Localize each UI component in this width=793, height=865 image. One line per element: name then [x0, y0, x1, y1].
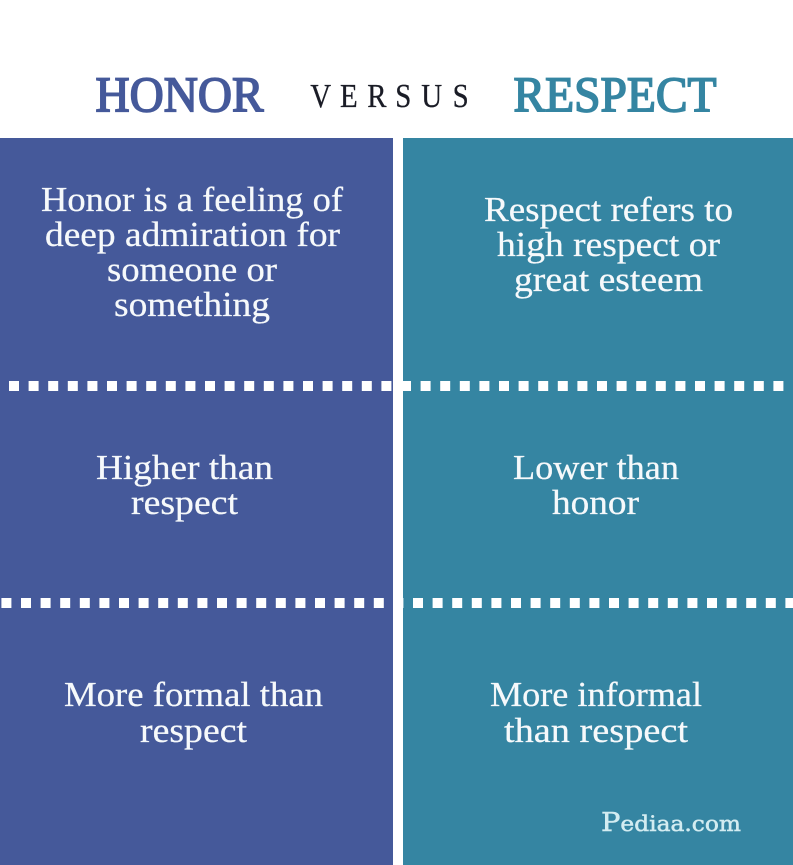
text: respect formality: than respect — [504, 712, 688, 750]
text: respect formality: More informal — [490, 676, 702, 714]
text: respect degree: honor — [552, 484, 640, 522]
text: honor formality — [64, 676, 323, 750]
text: respect definition: Respect refers to — [484, 191, 733, 229]
text: honor formality: More formal than — [64, 676, 323, 714]
logo: pediaa.com: Pediaa.com — [601, 808, 741, 838]
text: honor degree: respect — [131, 484, 238, 522]
text: respect definition — [484, 191, 733, 299]
text: respect definition: high respect or — [497, 226, 721, 264]
heading: honor: HONOR — [96, 66, 264, 122]
text: respect degree — [513, 449, 679, 522]
panel: respect — [403, 138, 793, 865]
text: honor definition: something — [114, 286, 270, 324]
text: respect formality — [490, 676, 702, 750]
text: honor definition: Honor is a feeling of — [41, 181, 344, 219]
text: honor definition: someone or — [107, 251, 278, 289]
heading: respect: RESPECT — [514, 66, 716, 122]
title — [96, 66, 716, 122]
panel: honor — [0, 138, 393, 865]
text: honor degree: Higher than — [96, 449, 273, 487]
text: honor degree — [96, 449, 273, 522]
text: respect definition: great esteem — [514, 261, 703, 299]
text: honor formality: respect — [140, 712, 247, 750]
text: honor definition — [41, 181, 344, 324]
text: honor definition: deep admiration for — [45, 216, 341, 254]
heading: versus: VERSUS — [310, 77, 469, 115]
text: respect degree: Lower than — [513, 449, 679, 487]
